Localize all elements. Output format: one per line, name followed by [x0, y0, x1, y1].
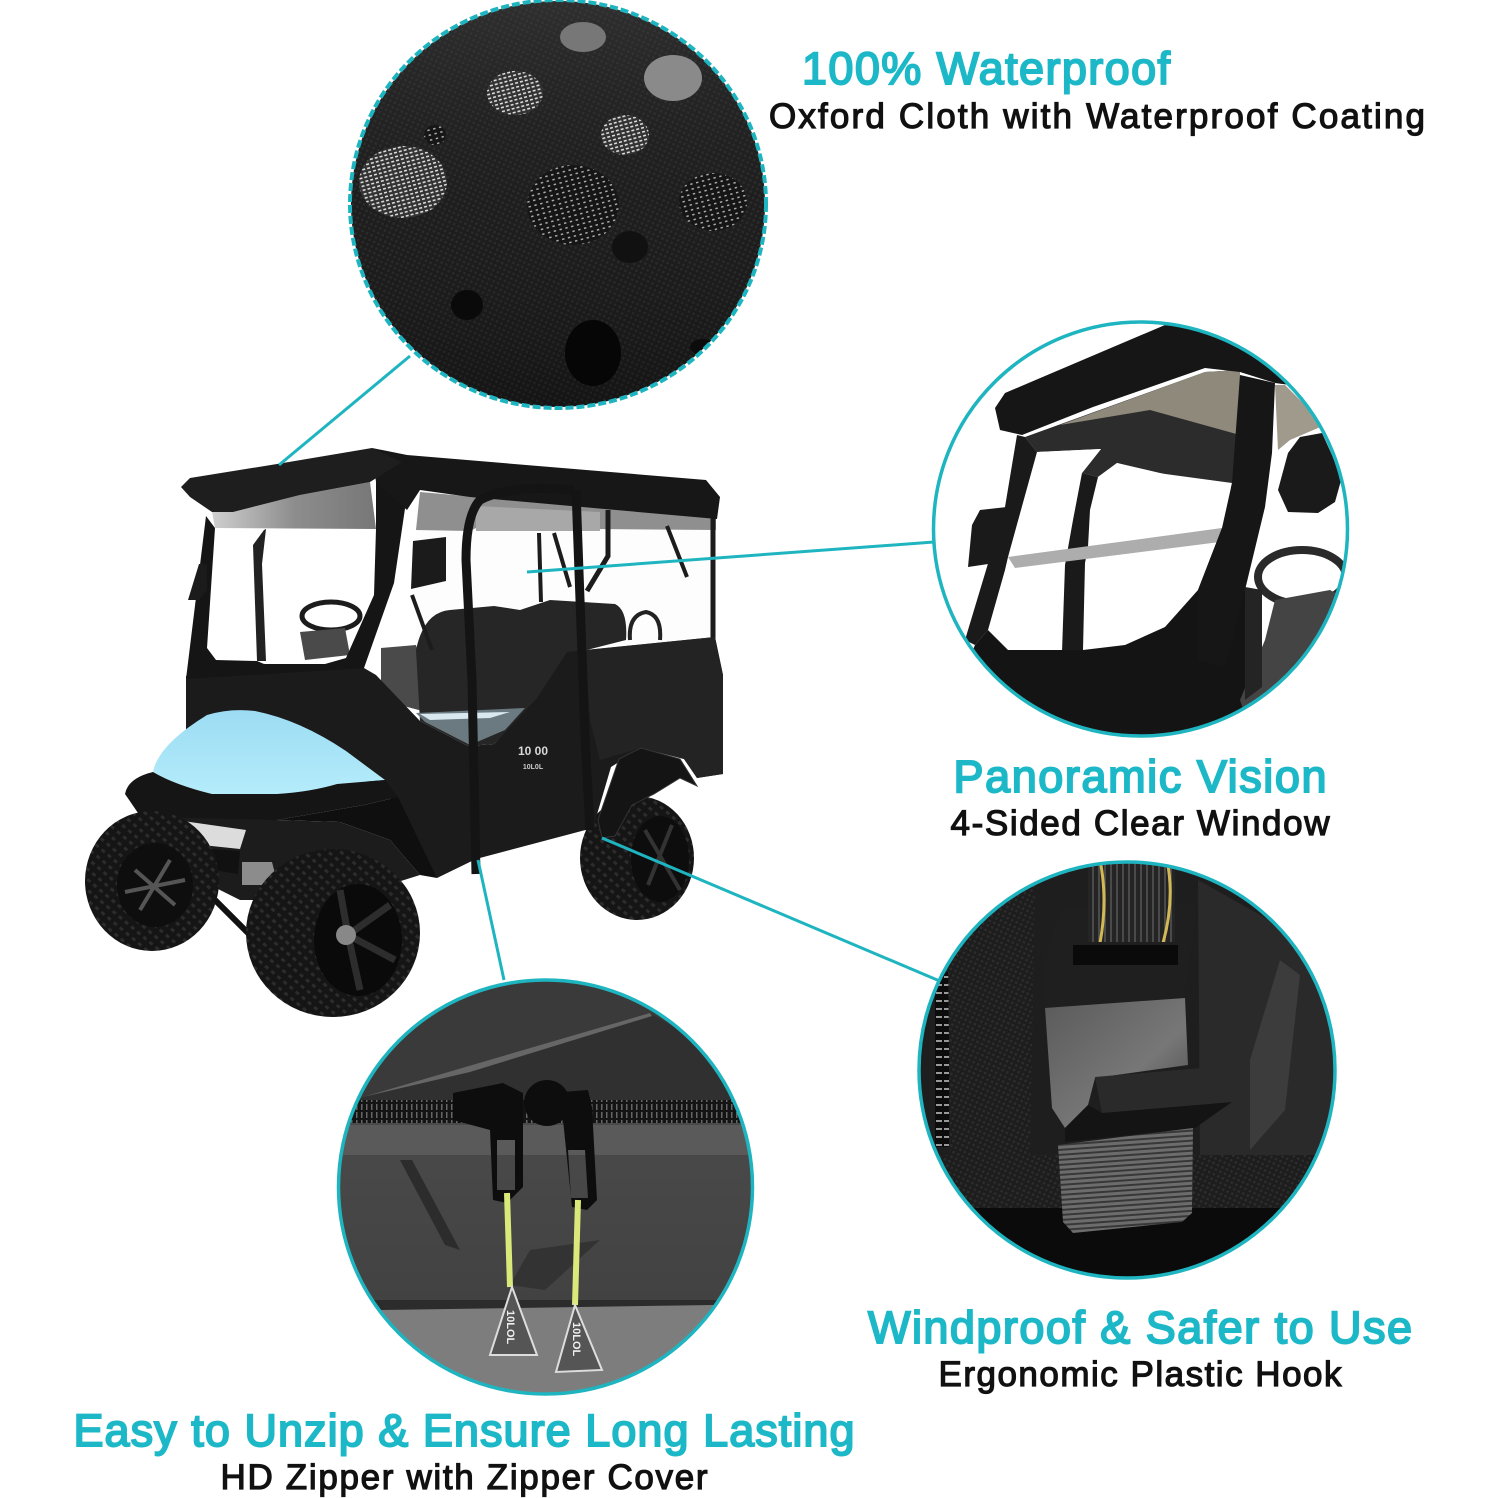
right fabric — [1198, 880, 1340, 1160]
rear fender — [598, 748, 697, 838]
rear wheel — [580, 796, 694, 920]
right tag — [556, 1305, 602, 1372]
enclosure side body — [186, 637, 723, 878]
ribbed tab — [1058, 1128, 1193, 1233]
front bumper — [125, 772, 398, 828]
panel: zipper circle — [335, 975, 760, 1400]
text: waterproof — [769, 43, 1425, 136]
zipper flap — [360, 1013, 732, 1100]
text: easy to unzip: HD Zipper with Zipper Cover — [220, 1458, 708, 1497]
right tag: 10LOL — [570, 1322, 582, 1357]
right side interior — [1240, 546, 1344, 707]
zipper teeth — [935, 972, 949, 1147]
interior seen through window — [1025, 370, 1240, 490]
text: panoramic vision — [950, 751, 1330, 843]
windshield frame — [186, 480, 407, 679]
logo on door: 10 00 — [518, 744, 548, 758]
cords — [507, 1193, 578, 1305]
golf cart with enclosure — [85, 448, 723, 1017]
strap — [1092, 864, 1172, 942]
text: windproof: Windproof & Safer to Use — [868, 1302, 1412, 1353]
panel: plastic hook circle — [915, 855, 1340, 1288]
front suspension — [215, 900, 250, 935]
A pillar — [1198, 375, 1275, 590]
left pillar — [965, 435, 1037, 645]
text: panoramic vision: 4-Sided Clear Window — [950, 804, 1330, 843]
left tag — [490, 1287, 537, 1355]
water drops — [359, 22, 747, 386]
text: panoramic vision: Panoramic Vision — [954, 751, 1326, 802]
frame rods and straps — [412, 510, 713, 650]
text: easy to unzip: Easy to Unzip & Ensure Long Lasting — [74, 1405, 854, 1456]
front right wheel — [246, 849, 420, 1017]
hook face — [1045, 998, 1188, 1128]
steering wheel and dash — [300, 602, 360, 660]
fabric folds — [400, 1160, 460, 1250]
text: waterproof: 100% Waterproof — [802, 43, 1170, 94]
window panes — [1038, 449, 1101, 473]
body — [974, 528, 1245, 734]
mirrors — [411, 537, 446, 589]
logo on door: 10L0L — [523, 764, 544, 771]
text: waterproof: Oxford Cloth with Waterproof Coating — [769, 97, 1425, 136]
undercarriage — [155, 817, 420, 900]
left zipper pull — [453, 1083, 523, 1203]
rear seat handle — [630, 612, 660, 640]
left tag: 10LOL — [504, 1310, 516, 1345]
panel: waterproof fabric circle — [340, 0, 780, 420]
zipper teeth — [335, 1100, 760, 1123]
roof side — [372, 448, 720, 519]
headlight — [155, 817, 246, 849]
text: easy to unzip — [74, 1405, 854, 1497]
right mirror — [1278, 433, 1342, 513]
connector lines — [279, 356, 942, 982]
window bar — [1008, 528, 1222, 568]
roof visor — [995, 325, 1290, 435]
hook plate — [1092, 942, 1172, 945]
left mirror — [968, 507, 1007, 567]
side clear windows — [416, 505, 716, 715]
panel: clear window circle — [930, 320, 1355, 760]
roof front visor — [181, 448, 402, 512]
hook lip — [1095, 1068, 1200, 1113]
text: windproof — [868, 1302, 1412, 1394]
text: windproof: Ergonomic Plastic Hook — [938, 1355, 1342, 1394]
hook lower — [1065, 1102, 1232, 1142]
clear plastic bottom — [381, 1305, 714, 1392]
inner frame — [1062, 473, 1098, 652]
right zipper pull — [524, 1080, 570, 1126]
door pillars — [466, 488, 590, 874]
tan background — [1275, 385, 1319, 450]
front fender — [277, 797, 437, 878]
seats and cabin interior — [381, 600, 626, 746]
clear band under visor — [212, 482, 376, 529]
front windows — [207, 528, 376, 661]
lower hem — [940, 1155, 1314, 1208]
front left wheel — [85, 811, 219, 951]
blue hood — [153, 710, 385, 794]
stitched band — [948, 880, 1035, 1155]
logo on door — [518, 744, 548, 771]
